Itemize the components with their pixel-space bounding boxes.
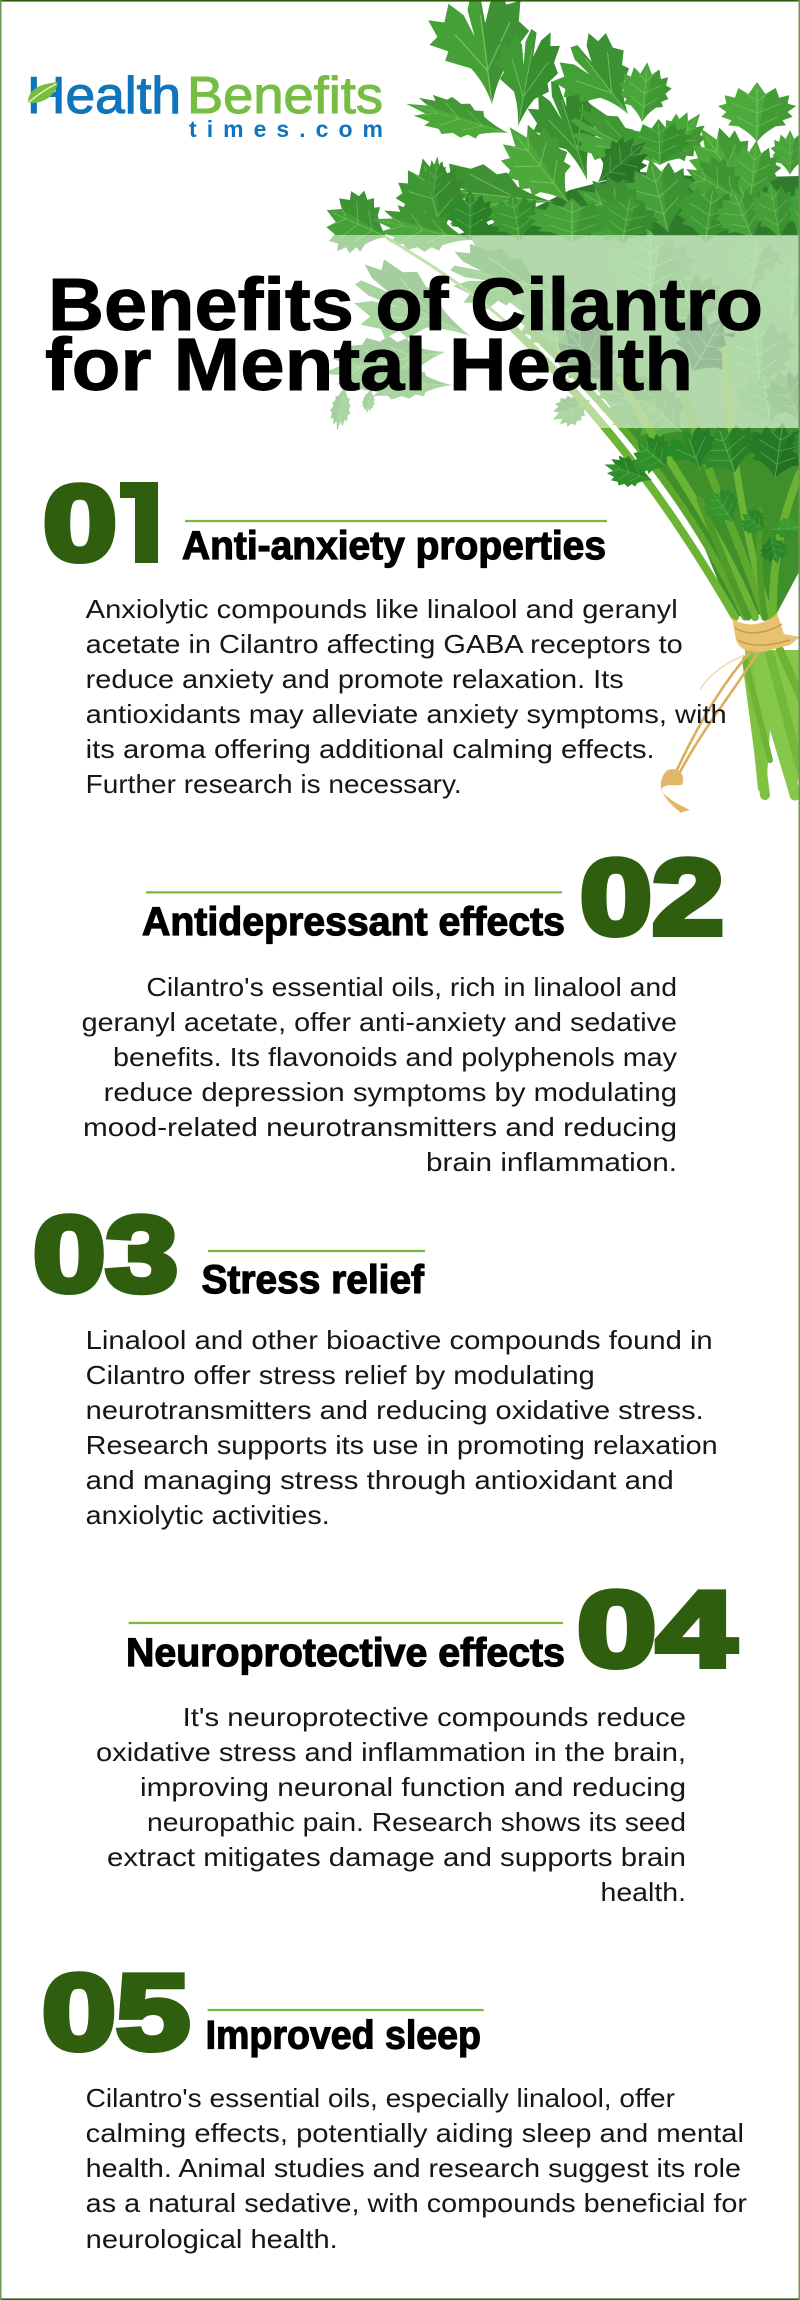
body text: extract mitigates damage and supports brain <box>107 1842 686 1872</box>
heading: Neuroprotective effects <box>126 1631 565 1675</box>
body text: Linalool and other bioactive compounds found in <box>86 1325 713 1355</box>
section 05: Improved sleep <box>42 1952 747 2254</box>
body text: mood-related neurotransmitters and reducing <box>83 1112 677 1142</box>
title: for Mental Health <box>45 323 693 406</box>
heading: Antidepressant effects <box>142 900 565 944</box>
body text: It's neuroprotective compounds reduce <box>183 1702 686 1732</box>
number 01 <box>44 482 158 564</box>
dark foliage mass <box>440 172 800 617</box>
body text: Anxiolytic compounds like linalool and geranyl <box>86 594 678 624</box>
upper leaves <box>313 0 800 267</box>
translucent title band <box>0 235 800 428</box>
logo <box>27 67 383 142</box>
body text: acetate in Cilantro affecting GABA receptors to <box>86 629 683 659</box>
twine <box>661 613 800 813</box>
body text: health. <box>600 1877 686 1907</box>
body text <box>86 1325 718 1530</box>
number 01: 1 <box>112 463 172 583</box>
logo wordmark: Benefits: Benefits <box>187 67 383 125</box>
body text: Cilantro's essential oils, rich in linalool and <box>146 972 677 1002</box>
body text: Research supports its use in promoting relaxation <box>86 1430 718 1460</box>
rule <box>146 891 562 894</box>
icon: leaf on H <box>28 82 58 103</box>
body text: neurological health. <box>86 2224 338 2254</box>
rule <box>208 2009 484 2011</box>
number 01: 0 <box>43 463 117 583</box>
body text: oxidative stress and inflammation in the brain, <box>96 1737 686 1767</box>
body text: Cilantro's essential oils, especially linalool, offer <box>86 2083 675 2113</box>
heading: Anti-anxiety properties <box>182 524 606 568</box>
body text: Further research is necessary. <box>86 769 462 799</box>
section 02: Antidepressant effects <box>82 837 724 1177</box>
body text <box>86 2083 747 2254</box>
body text: geranyl acetate, offer anti-anxiety and sedative <box>82 1007 677 1037</box>
number 02: 02 <box>580 837 724 957</box>
body text: reduce depression symptoms by modulating <box>104 1077 677 1107</box>
body text: benefits. Its flavonoids and polyphenols may <box>113 1042 677 1072</box>
section 03: Stress relief <box>33 1194 718 1530</box>
logo wordmark: Health: Health <box>27 67 181 125</box>
number 04: 04 <box>577 1569 736 1689</box>
logo wordmark: times.com: times.com <box>189 116 383 142</box>
body text: anxiolytic activities. <box>86 1500 330 1530</box>
rule <box>129 1622 563 1624</box>
stems <box>387 238 800 797</box>
heading: Improved sleep <box>206 2014 481 2058</box>
title <box>45 263 763 406</box>
body text <box>96 1702 686 1907</box>
body text: health. Animal studies and research suggest its role <box>86 2153 741 2183</box>
section 01: Anti-anxiety properties <box>43 463 727 799</box>
body text: and managing stress through antioxidant and <box>86 1465 674 1495</box>
heading: Stress relief <box>202 1258 425 1302</box>
lower leaves <box>600 413 800 568</box>
body text: improving neuronal function and reducing <box>140 1772 686 1802</box>
body text: reduce anxiety and promote relaxation. Its <box>86 664 624 694</box>
section 04: Neuroprotective effects <box>96 1569 736 1907</box>
body text: calming effects, potentially aiding sleep and mental <box>86 2118 744 2148</box>
body text: brain inflammation. <box>426 1147 677 1177</box>
body text: neurotransmitters and reducing oxidative stress. <box>86 1395 704 1425</box>
body text: its aroma offering additional calming effects. <box>86 734 655 764</box>
body text: antioxidants may alleviate anxiety symptoms, with <box>86 699 727 729</box>
body text: neuropathic pain. Research shows its seed <box>147 1807 686 1837</box>
number 03: 03 <box>33 1194 178 1314</box>
body text: as a natural sedative, with compounds beneficial for <box>86 2188 747 2218</box>
body text <box>82 972 677 1177</box>
rule <box>208 1250 425 1252</box>
body text <box>86 594 727 799</box>
image: cilantro bunch <box>313 0 800 813</box>
title: Benefits of Cilantro <box>48 263 763 346</box>
body text: Cilantro offer stress relief by modulating <box>86 1360 595 1390</box>
leaves behind translucent band <box>317 197 800 454</box>
rule <box>185 520 607 522</box>
number 05: 05 <box>42 1952 190 2072</box>
